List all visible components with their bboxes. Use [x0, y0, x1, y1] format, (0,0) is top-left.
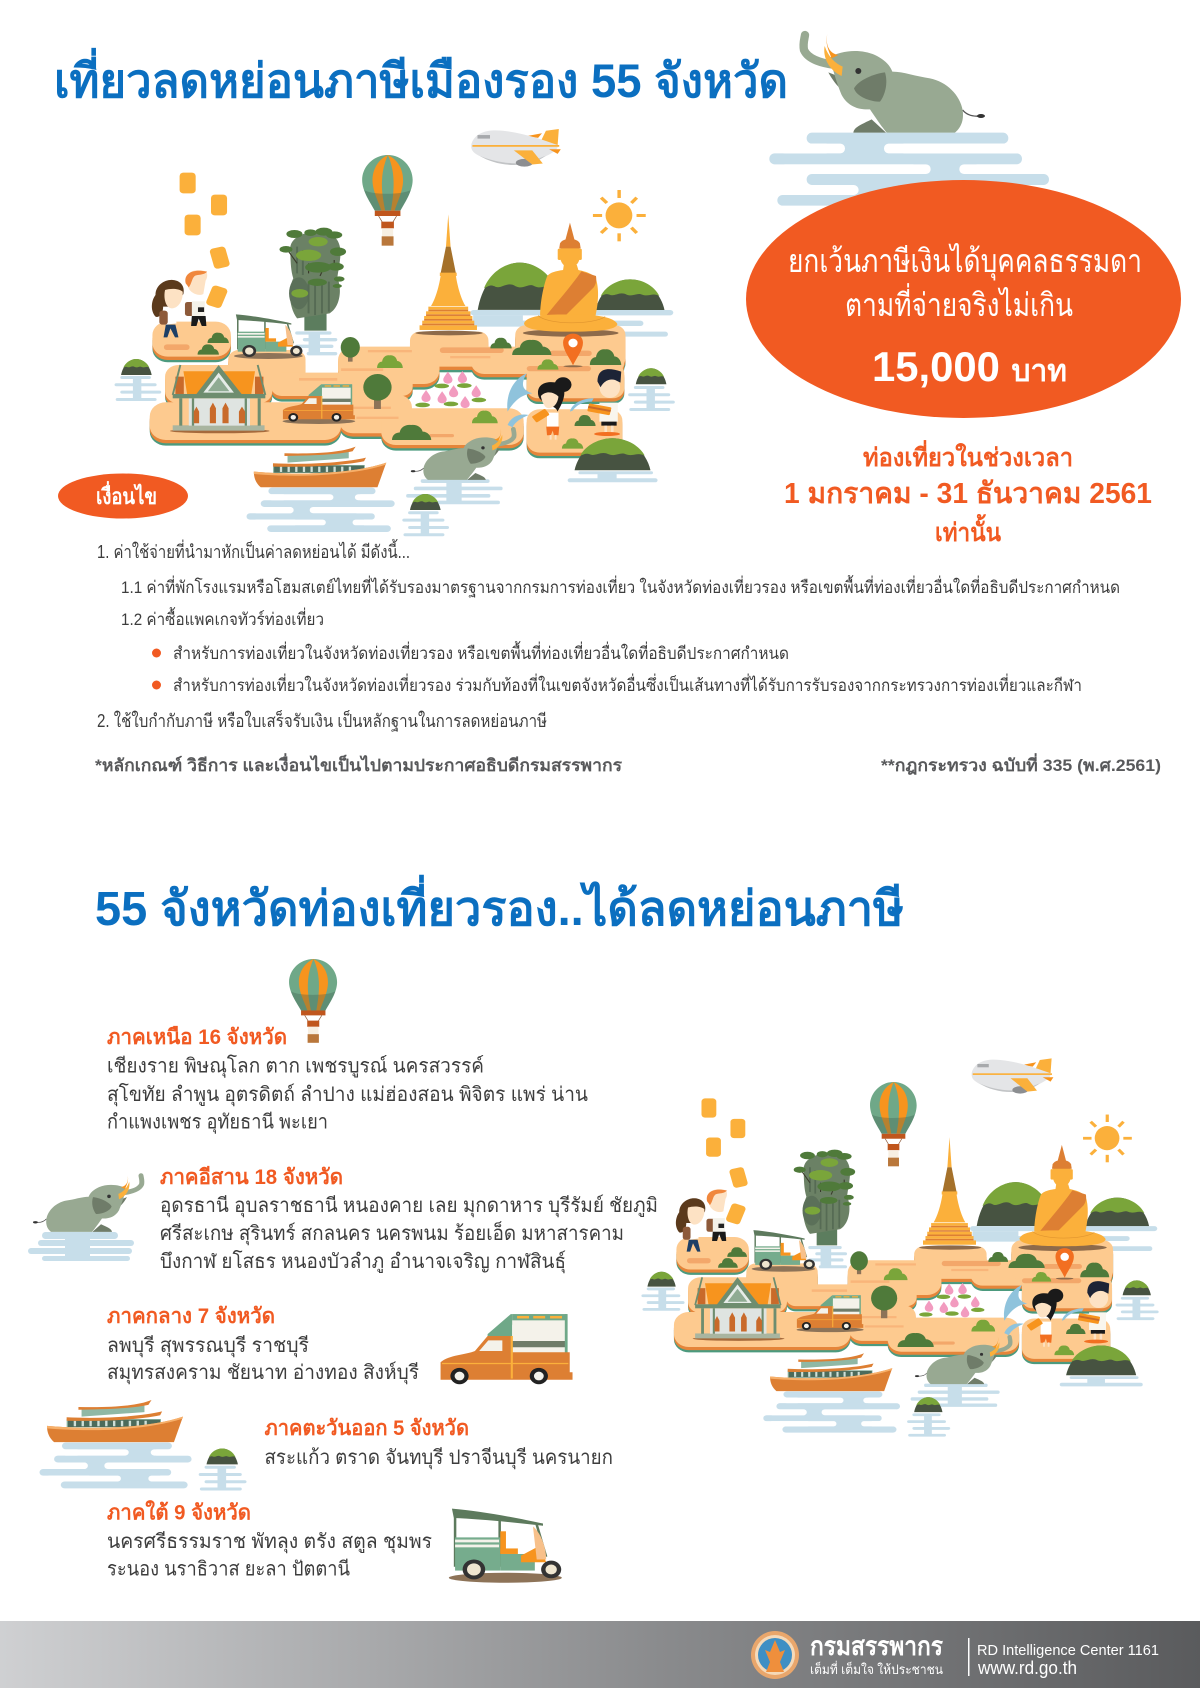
footer band: RD Intelligence Center 1161 [977, 1642, 1159, 1659]
region: south [107, 1500, 432, 1580]
icon: songthaew truck [283, 384, 355, 422]
small islands [115, 359, 675, 482]
region: northeast [160, 1165, 658, 1274]
characters: tourists [152, 270, 207, 337]
footer band: กรมสรรพากร [810, 1631, 943, 1661]
region: northeast: ภาคอีสาน 18 จังหวัด [160, 1165, 343, 1189]
region: north: เชียงราย พิษณุโลก ตาก เพชรบูรณ์ นครสวรรค์ [107, 1054, 484, 1078]
trees and bushes [198, 333, 621, 449]
footnotes: *หลักเกณฑ์ วิธีการ และเงื่อนไขเป็นไปตามประกาศอธิบดีกรมสรรพากร [95, 753, 623, 775]
icon: temple [170, 365, 270, 433]
footer band: www.rd.go.th [977, 1658, 1077, 1678]
lotus pond [415, 371, 486, 408]
icon: boat on water [247, 447, 397, 532]
region: central: ภาคกลาง 7 จังหวัด [107, 1305, 275, 1328]
icon: sun [593, 190, 646, 241]
icon: stupa [415, 214, 483, 335]
map illustration: second copy [641, 1082, 1159, 1437]
region: north [107, 1025, 588, 1134]
text block: conditions list [97, 539, 1120, 732]
region: east: สระแก้ว ตราด จันทบุรี ปราจีนบุรี นครนายก [264, 1447, 613, 1470]
text: travel period: เท่านั้น [935, 513, 1001, 547]
text block: conditions list: 1.2 ค่าซื้อแพคเกจทัวร์ท่องเที่ยว [121, 607, 324, 629]
shadow under truck [283, 419, 355, 424]
icon: airplane second [972, 1058, 1053, 1094]
badge: conditions [58, 474, 188, 518]
region: south: ภาคใต้ 9 จังหวัด [107, 1500, 251, 1524]
region: east: ภาคตะวันออก 5 จังหวัด [264, 1417, 469, 1440]
text block: conditions list: สำหรับการท่องเที่ยวในจังหวัดท่องเที่ยวรอง หรือเขตพื้นที่ท่องเที่ยวอื่นใดที่อธิบดีประกาศกำหนด [173, 641, 789, 663]
region: north: สุโขทัย ลำพูน อุตรดิตถ์ ลำปาง แม่ฮ่องสอน พิจิตร แพร่ น่าน [107, 1083, 588, 1107]
map illustration: Thailand [115, 155, 675, 536]
region: central: สมุทรสงคราม ชัยนาท อ่างทอง สิงห์บุรี [107, 1361, 419, 1385]
icon: elephant in the water [406, 429, 514, 504]
icon: islet beside east region [199, 1449, 247, 1490]
region: north: กำแพงเพชร อุทัยธานี พะเยา [107, 1112, 328, 1134]
text: travel period: 1 มกราคม - 31 ธันวาคม 2561 [784, 478, 1152, 510]
text: travel period: ท่องเที่ยวในช่วงเวลา [863, 440, 1073, 472]
icon: floating lanterns [180, 173, 230, 309]
characters: children splashing water [507, 369, 621, 440]
footnotes: **กฎกระทรวง ฉบับที่ 335 (พ.ศ.2561) [881, 753, 1161, 775]
icon: elephant on water [769, 34, 1049, 206]
footer band [0, 1621, 1200, 1688]
region: central [107, 1305, 419, 1385]
icon: tuk tuk [234, 314, 303, 359]
title: เที่ยวลดหย่อนภาษีเมืองรอง 55 จังหวัด [54, 47, 788, 107]
icon: location pin [563, 334, 583, 367]
callout: tax exemption ellipse [746, 180, 1181, 418]
icon: limestone rock [279, 228, 346, 355]
hills behind the buddha [470, 263, 673, 337]
callout: tax exemption ellipse: ตามที่จ่ายจริงไม่เกิน [845, 283, 1073, 323]
icon: boat beside east region [40, 1400, 194, 1488]
region: south: ระนอง นราธิวาส ยะลา ปัตตานี [107, 1558, 350, 1580]
text: travel period [784, 440, 1152, 547]
icon: truck beside central region [441, 1314, 573, 1384]
region: northeast: อุดรธานี อุบลราชธานี หนองคาย เลย มุกดาหาร บุรีรัมย์ ชัยภูมิ [160, 1194, 658, 1218]
icon: balloon beside north heading [289, 959, 337, 1043]
heading: 55 provinces: 55 จังหวัดท่องเที่ยวรอง..ได้ลดหย่อนภาษี [95, 874, 904, 936]
region: south: นครศรีธรรมราช พัทลุง ตรัง สตูล ชุมพร [107, 1531, 432, 1554]
text block: conditions list: 1. ค่าใช้จ่ายที่นำมาหักเป็นค่าลดหย่อนได้ มีดังนี้... [97, 539, 410, 562]
badge: conditions: เงื่อนไข [96, 480, 157, 509]
footnotes [95, 753, 1161, 775]
icon: elephant beside northeast region [28, 1175, 142, 1261]
icon: airplane [471, 129, 561, 167]
region: northeast: ศรีสะเกษ สุรินทร์ สกลนคร นครพนม ร้อยเอ็ด มหาสารคาม [160, 1220, 624, 1246]
region: north: ภาคเหนือ 16 จังหวัด [107, 1025, 287, 1049]
footer band: เต็มที่ เต็มใจ ให้ประชาชน [810, 1660, 943, 1677]
icon: revenue department emblem [751, 1631, 799, 1679]
icon: tuk tuk beside south region [449, 1509, 562, 1583]
region: central: ลพบุรี สุพรรณบุรี ราชบุรี [107, 1335, 309, 1358]
map land [150, 322, 625, 458]
text block: conditions list: 2. ใช้ใบกำกับภาษี หรือใบเสร็จรับเงิน เป็นหลักฐานในการลดหย่อนภาษี [97, 709, 547, 732]
icon: hot air balloon [362, 155, 413, 246]
callout: tax exemption ellipse: 15,000 บาท [872, 343, 1067, 390]
icon: buddha statue [523, 223, 619, 337]
text block: conditions list: สำหรับการท่องเที่ยวในจังหวัดท่องเที่ยวรอง ร่วมกับท้องที่ในเขตจังหวัดอื่นซึ่งเป็นเส้นทางที่ได้รับการรับรองจากกระทรวงการท่องเที่ยวและกีฬา [173, 673, 1082, 695]
region: northeast: บึงกาฬ ยโสธร หนองบัวลำภู อำนาจเจริญ กาฬสินธุ์ [160, 1250, 566, 1274]
region: east [264, 1417, 613, 1470]
icon: islet with water [402, 494, 449, 536]
